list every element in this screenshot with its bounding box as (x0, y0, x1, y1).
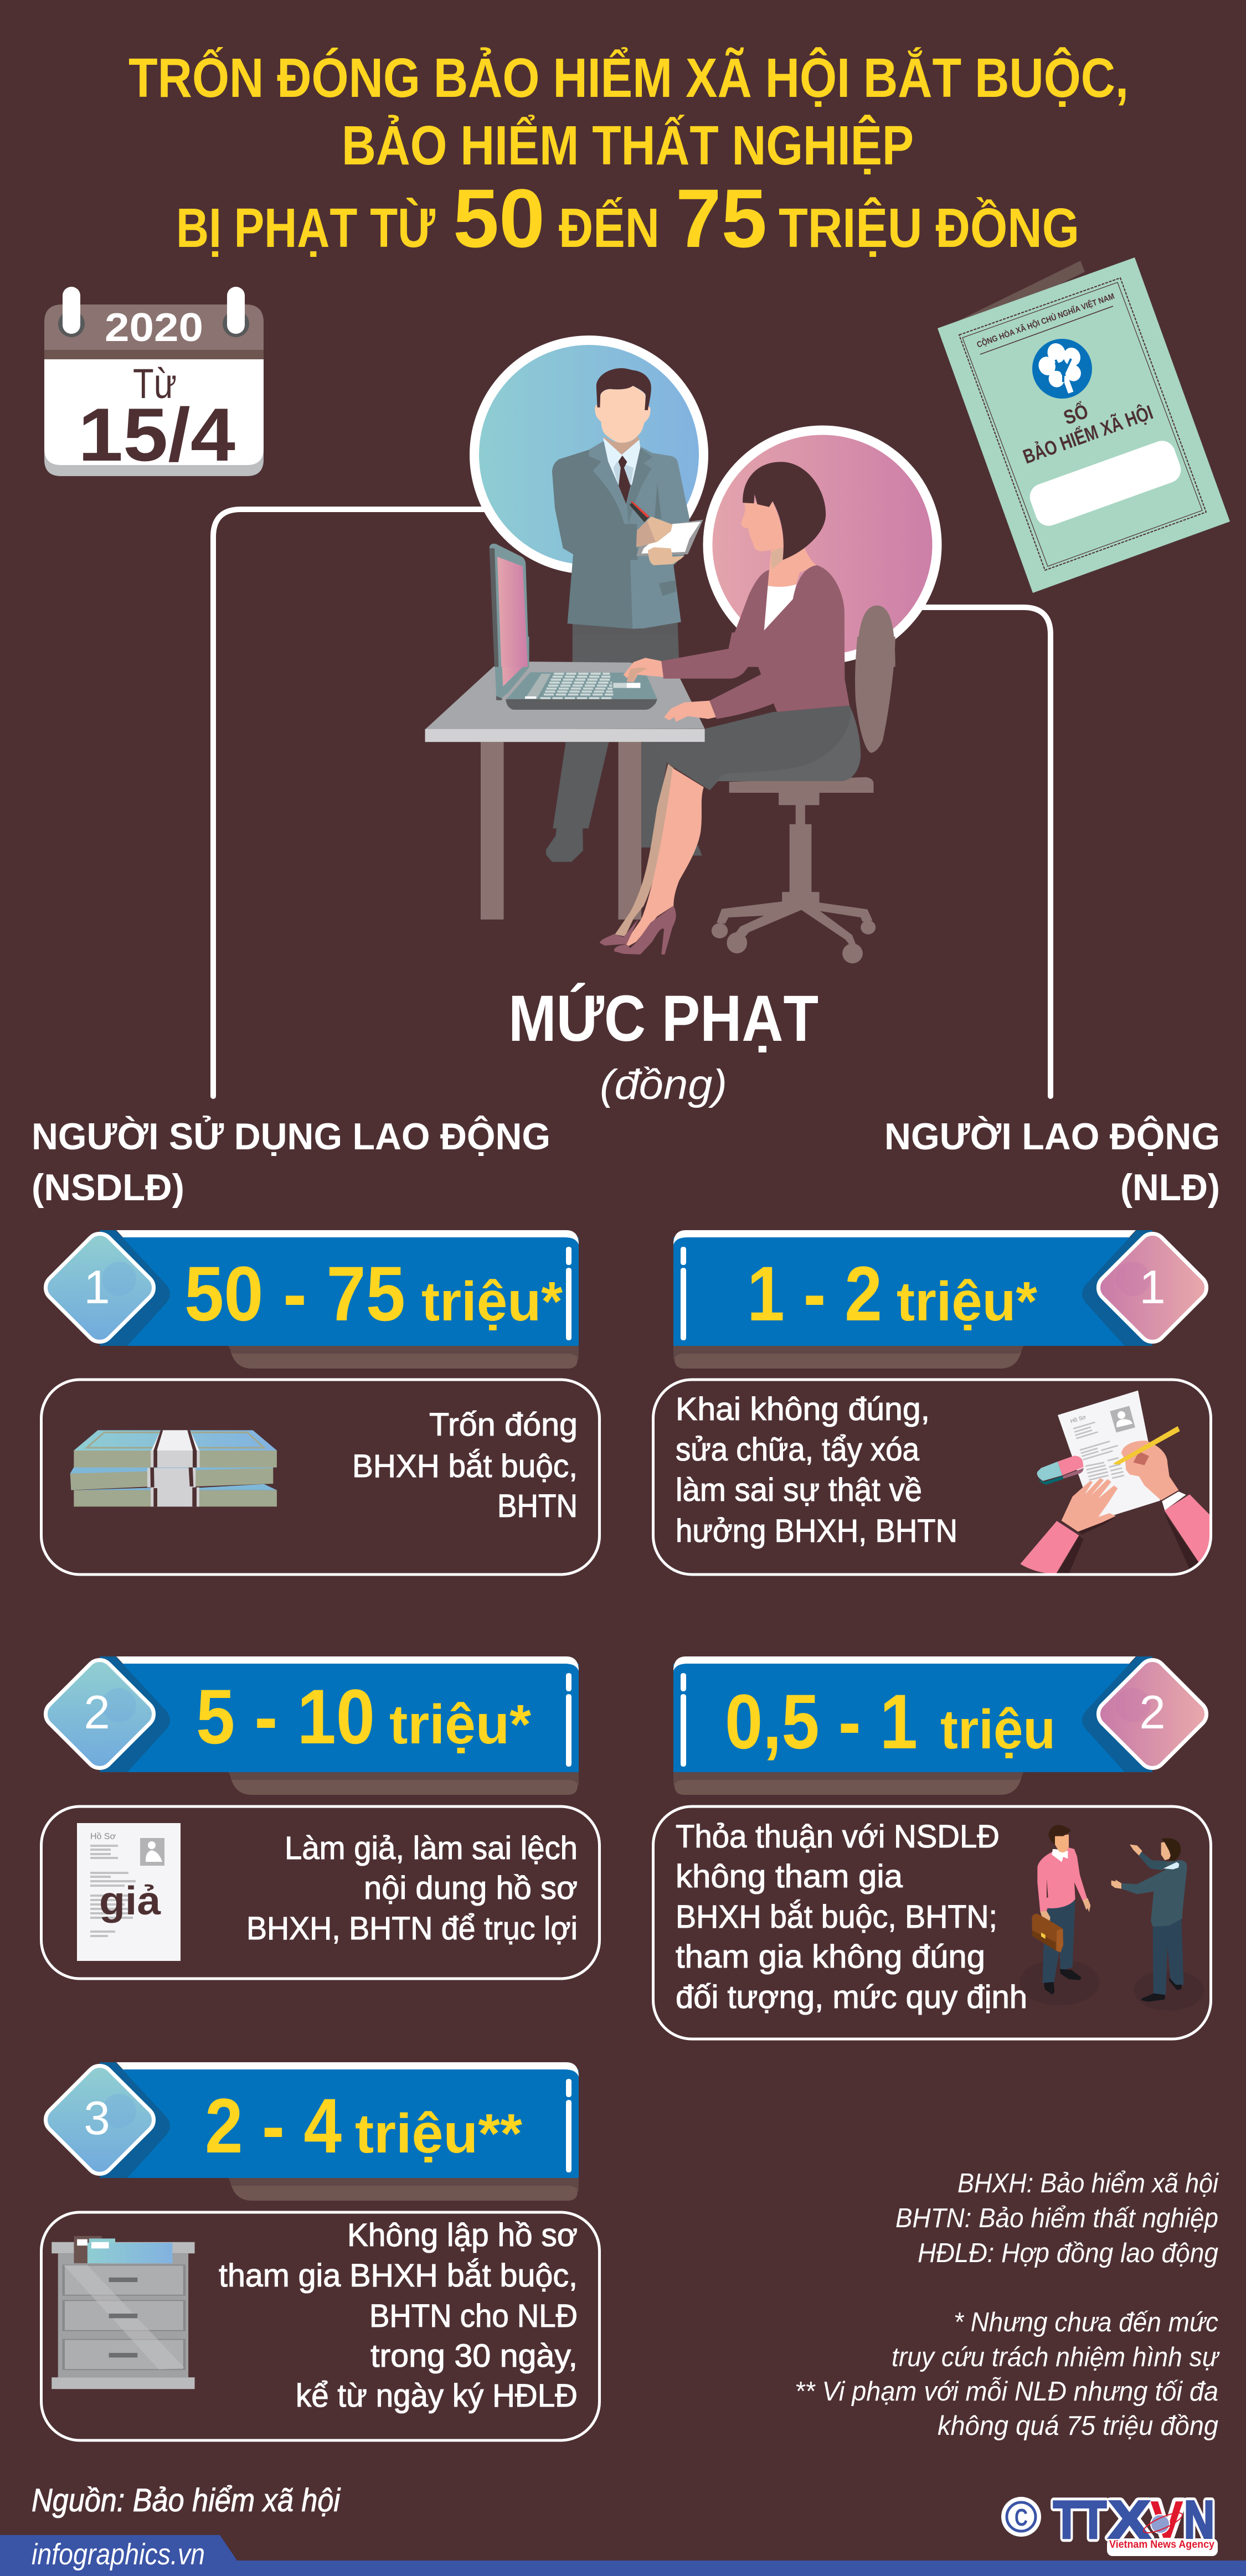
employee banner 2: triệu (940, 1699, 1056, 1761)
notes: abbreviations: BHTN: Bảo hiểm thất nghiệp (895, 2203, 1218, 2233)
employer box 2: BHXH, BHTN để trục lợi (246, 1911, 578, 1947)
book: social insurance: BẢO HIỂM XÃ HỘI (1020, 400, 1156, 468)
employer banner 1: triệu* (421, 1271, 563, 1333)
employer box 2: Làm giả, làm sai lệch (285, 1830, 578, 1866)
employee box 1: sửa chữa, tẩy xóa (676, 1432, 920, 1468)
logo: TTXVN: N (1184, 2490, 1214, 2549)
calendar: from 15/4/2020: Từ (133, 360, 177, 407)
icon: filing cabinet (52, 2236, 195, 2389)
logo: TTXVN: TT (1053, 2490, 1106, 2549)
logo: TTXVN (1001, 2490, 1218, 2556)
title: ĐẾN (559, 197, 660, 259)
desk, laptop, chair and woman (425, 632, 895, 963)
heading: employer (32, 1115, 550, 1209)
employer banner 2: 5 - 10 (196, 1673, 375, 1760)
bracket lines (213, 509, 1051, 1096)
employer banner 1: 1 (84, 1261, 110, 1314)
calendar: from 15/4/2020: 15/4 (78, 393, 235, 477)
icon: hands writing on a form (1020, 1391, 1211, 1574)
logo: TTXVN: C (1015, 2504, 1028, 2531)
heading: penalty level (508, 982, 818, 1108)
logo: TTXVN: X (1109, 2490, 1150, 2549)
employee box 2: đối tượng, mức quy định (676, 1979, 1027, 2015)
icon: fake document: giả (99, 1879, 161, 1923)
title: 75 (676, 172, 767, 265)
woman upper body (490, 462, 895, 667)
icon: two men talking (1020, 1825, 1204, 2011)
title: BẢO HIỂM THẤT NGHIỆP (342, 114, 914, 177)
title: BỊ PHẠT TỪ (176, 197, 435, 259)
heading: employer: NGƯỜI SỬ DỤNG LAO ĐỘNG (32, 1115, 550, 1158)
employee banner 1: 1 (1139, 1261, 1166, 1314)
notes: footnotes: ** Vi phạm với mỗi NLĐ nhưng tối đa (795, 2377, 1218, 2407)
employer box 3: kể từ ngày ký HĐLĐ (296, 2378, 578, 2414)
title: TRIỆU ĐỒNG (779, 197, 1079, 259)
footer site name: infographics.vn (32, 2538, 205, 2571)
logo: TTXVN: V (1150, 2490, 1183, 2549)
employer banner 2: 2 (84, 1686, 110, 1739)
employee box 2: tham gia không đúng (676, 1939, 985, 1975)
employer box 2: nội dung hồ sơ (364, 1870, 578, 1906)
employer box 3: tham gia BHXH bắt buộc, (219, 2258, 578, 2294)
logo: TTXVN: V (1150, 2490, 1183, 2549)
employer banner 2: triệu* (389, 1694, 531, 1756)
employee banner 2: 0,5 - 1 (725, 1678, 918, 1765)
book: social insurance (938, 257, 1230, 593)
notes: footnotes: truy cứu trách nhiệm hình sự (892, 2342, 1220, 2372)
employer banner 1 (40, 1228, 579, 1369)
employer box 1 (41, 1380, 599, 1574)
book: social insurance: SỔ (1060, 399, 1091, 429)
employer box 3: Không lập hồ sơ (347, 2217, 578, 2253)
employee box 2: Thỏa thuận với NSDLĐ (676, 1819, 1000, 1855)
notes: abbreviations: HĐLĐ: Hợp đồng lao động (918, 2238, 1218, 2268)
logo: TTXVN: Vietnam News Agency (1109, 2539, 1214, 2551)
source: Nguồn: Bảo hiểm xã hội (32, 2482, 341, 2518)
circle: blue (474, 340, 703, 569)
employer box 3: trong 30 ngày, (370, 2338, 578, 2374)
book: social insurance: CỘNG HÒA XÃ HỘI CHỦ NGHĨA VIỆT NAM (975, 291, 1116, 350)
man standing (552, 368, 703, 667)
employer box 1: Trốn đóng (429, 1407, 578, 1443)
employer banner 3 (40, 2061, 579, 2201)
employee box 1: Khai không đúng, (676, 1391, 930, 1427)
employer box 1: BHTN (497, 1488, 578, 1524)
employee banner 2 (673, 1655, 1212, 1795)
title (128, 47, 1129, 265)
employee box 2: không tham gia (676, 1859, 903, 1894)
heading: penalty level: (đồng) (600, 1061, 727, 1108)
notes: abbreviations: BHXH: Bảo hiểm xã hội (957, 2169, 1219, 2198)
employer banner 3: triệu** (355, 2103, 522, 2165)
employer box 3: BHTN cho NLĐ (369, 2298, 578, 2334)
heading: employee: NGƯỜI LAO ĐỘNG (884, 1115, 1220, 1158)
employer banner 1: 50 - 75 (184, 1250, 405, 1337)
employee box 1 (653, 1380, 1211, 1574)
logo: TTXVN: N (1184, 2490, 1214, 2549)
icon: hands writing on a form: Hồ Sơ (1069, 1414, 1087, 1425)
employee box 1: hưởng BHXH, BHTN (676, 1513, 957, 1549)
icon: money stacks (70, 1430, 277, 1506)
circle: pink (708, 430, 937, 659)
employee box 2: BHXH bắt buộc, BHTN; (676, 1899, 997, 1935)
logo: TTXVN: TT (1053, 2490, 1106, 2549)
employer banner 2 (40, 1655, 579, 1795)
logo: TTXVN: X (1109, 2490, 1150, 2549)
employer box 3 (41, 2212, 599, 2440)
calendar: from 15/4/2020: 2020 (105, 306, 203, 350)
heading: employee (884, 1115, 1220, 1209)
notes: abbreviations (895, 2169, 1219, 2268)
employer box 1: BHXH bắt buộc, (352, 1448, 578, 1484)
heading: penalty level: MỨC PHẠT (508, 982, 818, 1055)
employer banner 3: 3 (84, 2092, 110, 2145)
notes: footnotes (795, 2307, 1220, 2441)
employer box 2 (41, 1806, 599, 1979)
employee banner 2: 2 (1139, 1686, 1166, 1739)
notes: footnotes: * Nhưng chưa đến mức (954, 2307, 1218, 2337)
title: 50 (453, 172, 545, 265)
heading: employee: (NLĐ) (1120, 1166, 1220, 1209)
notes: footnotes: không quá 75 triệu đồng (938, 2411, 1218, 2441)
employee banner 1: triệu* (897, 1271, 1037, 1333)
employee banner 1: 1 - 2 (747, 1250, 882, 1337)
footer band (0, 2535, 1246, 2576)
heading: employer: (NSDLĐ) (32, 1166, 184, 1209)
employee box 2 (653, 1806, 1211, 2039)
employee banner 1 (673, 1228, 1212, 1369)
icon: fake document (77, 1823, 181, 1961)
illustration: office workers (425, 340, 937, 963)
icon: fake document: Hồ Sơ (90, 1832, 116, 1841)
employee box 1: làm sai sự thật về (676, 1472, 922, 1508)
employer banner 3: 2 - 4 (205, 2082, 342, 2169)
calendar: from 15/4/2020 (44, 287, 264, 477)
